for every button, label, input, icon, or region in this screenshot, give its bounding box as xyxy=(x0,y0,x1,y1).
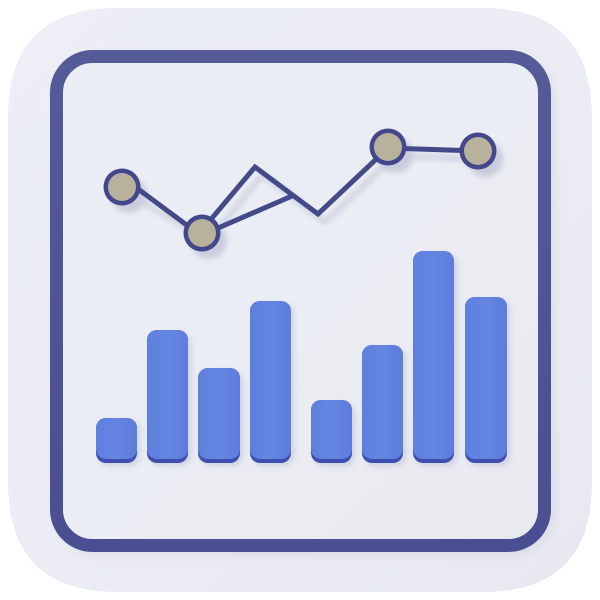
data point 4 xyxy=(460,132,496,170)
line chart xyxy=(104,128,503,259)
line series xyxy=(130,148,478,235)
bar chart xyxy=(96,251,510,466)
bar 1 xyxy=(96,418,137,463)
bar 2 xyxy=(147,330,188,463)
bar 5 xyxy=(311,400,352,463)
bar 4 xyxy=(250,301,291,463)
bar shadows xyxy=(99,254,510,466)
bar 3 xyxy=(198,368,240,463)
bar 8 xyxy=(465,297,507,463)
data point 2 xyxy=(184,214,220,252)
panel: inner frame xyxy=(56,56,549,550)
data point 1 xyxy=(104,168,140,206)
bar 6 xyxy=(362,345,403,463)
data point 3 xyxy=(370,128,406,166)
bar 7 xyxy=(413,251,454,463)
line chart shadow xyxy=(111,137,503,259)
